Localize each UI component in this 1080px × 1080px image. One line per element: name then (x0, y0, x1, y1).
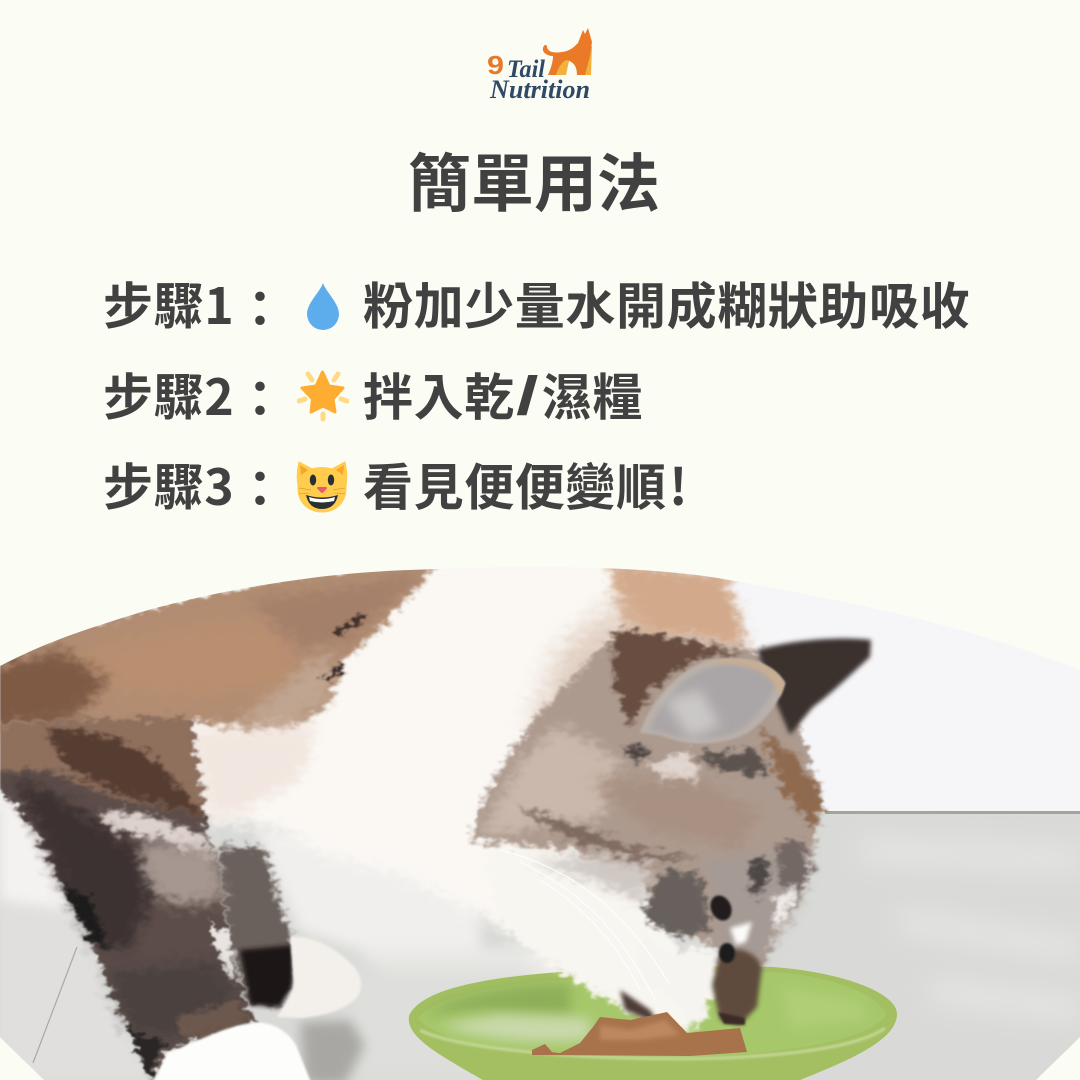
step 3 label: 步驟3 (103, 448, 234, 520)
logo text: Nutrition: Nutrition (489, 75, 590, 104)
cat back leg with paw (217, 847, 361, 1018)
cat body (0, 568, 756, 945)
step 3 colon: ： (235, 450, 286, 522)
step 1 text: 粉加少量水開成糊狀助吸收 (363, 267, 970, 339)
step 2 text: 拌入乾 (363, 358, 515, 430)
logo text: Tail: Tail (507, 56, 545, 83)
logo: 9 Tail Nutrition (487, 28, 592, 104)
step 2 text end: 濕糧 (542, 358, 643, 430)
step 3 text: 看見便便變順 (363, 448, 667, 520)
logo text: 9: 9 (487, 50, 504, 80)
step 1 label: 步驟1 (103, 267, 234, 339)
step 2 label: 步驟2 (103, 358, 234, 430)
step 1 row (103, 267, 970, 342)
step 3 row (103, 448, 688, 522)
step 2 slash: / (516, 366, 539, 426)
step 1 colon: ： (235, 270, 286, 342)
bowl (409, 966, 897, 1080)
icon: orange cat (543, 28, 592, 75)
icon: grinning cat (296, 462, 348, 512)
wet food (532, 1012, 747, 1056)
step 2 colon: ： (235, 360, 286, 432)
title: 簡單用法 (408, 134, 660, 225)
icon: water drop (307, 283, 339, 330)
wall and floor (0, 789, 1080, 1080)
step 2 row (103, 358, 643, 432)
icon: glowing star (297, 370, 349, 422)
photo: cat eating from green bowl (0, 568, 1080, 1080)
cat ear (640, 638, 871, 743)
cat head and chest (470, 630, 823, 1030)
step 3 exclamation: ! (669, 448, 688, 520)
cat front leg stripes (0, 718, 312, 1080)
